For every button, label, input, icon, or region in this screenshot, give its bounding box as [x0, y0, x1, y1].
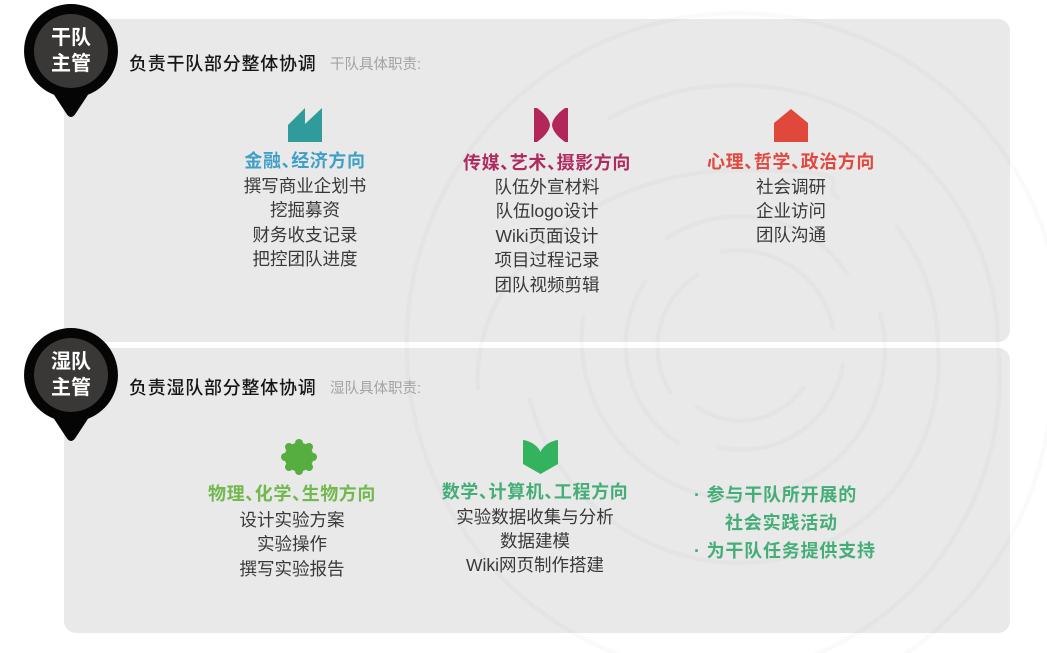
list: media duties: 项目过程记录 — [494, 250, 600, 270]
list: finance duties — [244, 176, 366, 269]
icon: book — [523, 440, 558, 474]
list: sciences duties: 实验操作 — [257, 534, 327, 554]
pin: wet team lead: 湿队 — [51, 351, 91, 373]
pin: dry team lead: 干队 — [51, 27, 91, 49]
heading: dry team overall duty: 负责干队部分整体协调 — [129, 54, 316, 74]
panel: dry team background — [64, 19, 1010, 342]
heading: psychology: 心理、哲学、政治方向 — [707, 152, 875, 172]
list: psychology duties — [756, 177, 826, 245]
list: media duties — [494, 177, 600, 295]
column: math, computing, engineering — [442, 440, 628, 575]
list: sciences duties: 设计实验方案 — [240, 510, 344, 530]
list: psychology duties: 团队沟通 — [756, 225, 826, 245]
column: physics, chemistry, biology — [208, 439, 376, 578]
list: psychology duties: 企业访问 — [756, 201, 826, 221]
column: media, art, photography — [463, 108, 631, 295]
callout: wet team support duties: 社会实践活动 — [725, 513, 838, 533]
list: finance duties: 把控团队进度 — [252, 249, 358, 269]
list: media duties: 队伍外宣材料 — [494, 177, 600, 197]
list: engineering duties — [456, 506, 614, 575]
list: media duties: 团队视频剪辑 — [494, 275, 600, 295]
icon: factory — [288, 108, 322, 142]
heading: wet team overall duty: 负责湿队部分整体协调 — [129, 378, 316, 398]
column: psychology, philosophy, politics — [707, 109, 875, 245]
panel: wet team background — [64, 348, 1010, 633]
icon: bow tie — [534, 108, 568, 142]
icon: house — [774, 109, 808, 142]
list: media duties: 队伍logo设计 — [495, 201, 599, 221]
pin: wet team lead: 主管 — [51, 377, 91, 399]
list: media duties: Wiki页面设计 — [495, 226, 599, 246]
heading: engineering: 数学、计算机、工程方向 — [442, 482, 628, 502]
list: finance duties: 财务收支记录 — [252, 225, 358, 245]
callout: wet team support duties — [694, 485, 876, 561]
pin: wet team lead — [24, 328, 118, 441]
list: sciences duties: 撰写实验报告 — [240, 558, 344, 578]
list: finance duties: 挖掘募资 — [270, 200, 340, 220]
list: psychology duties: 社会调研 — [756, 177, 826, 197]
pin: dry team lead — [24, 4, 118, 117]
callout: wet team support duties: · 参与干队所开展的 — [694, 485, 857, 505]
label: wet team duties: 湿队具体职责: — [330, 381, 421, 397]
heading: finance: 金融、经济方向 — [244, 151, 366, 171]
list: finance duties: 撰写商业企划书 — [244, 176, 366, 196]
heading: sciences: 物理、化学、生物方向 — [208, 484, 376, 504]
list: engineering duties: 数据建模 — [500, 531, 570, 551]
heading: media: 传媒、艺术、摄影方向 — [463, 153, 631, 173]
pin: dry team lead: 主管 — [51, 53, 91, 75]
label: dry team duties: 干队具体职责: — [330, 57, 421, 73]
list: engineering duties: Wiki网页制作搭建 — [466, 555, 604, 575]
list: sciences duties — [240, 510, 344, 578]
list: engineering duties: 实验数据收集与分析 — [456, 506, 614, 526]
callout: wet team support duties: · 为干队任务提供支持 — [694, 541, 876, 561]
column: finance and economics — [244, 108, 366, 269]
icon: gear — [281, 439, 317, 475]
